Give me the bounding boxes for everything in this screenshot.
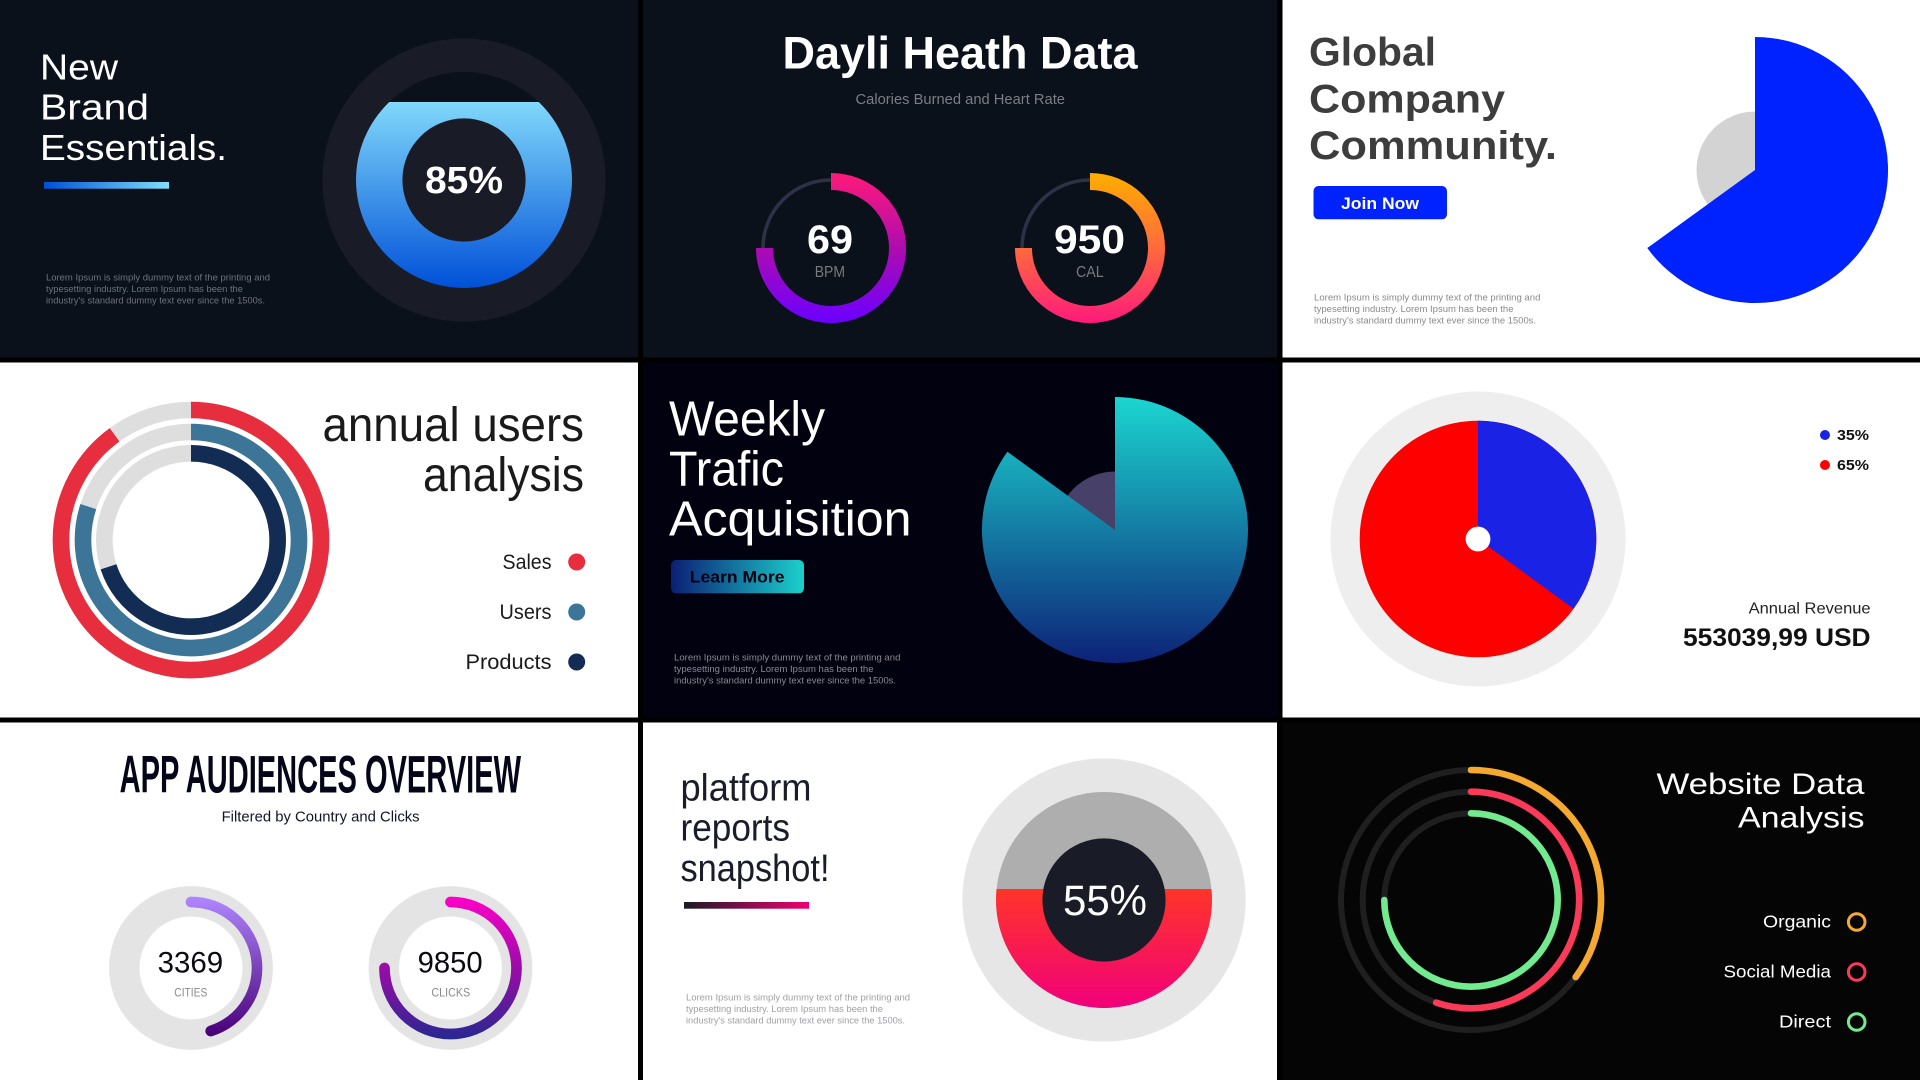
ring chart: 9850 clicks: 9850 xyxy=(418,946,483,979)
label: Annual Revenue: Annual Revenue xyxy=(1749,600,1871,617)
body text: Lorem Ipsum is simply dummy text of the printing and xyxy=(46,272,270,284)
accent bar xyxy=(684,902,809,909)
panel: annual users analysis xyxy=(0,362,638,718)
radial line chart xyxy=(1341,770,1601,1030)
heading: Global Company Community xyxy=(1309,31,1557,168)
heading: APP AUDIENCES OVERVIEW: APP AUDIENCES OVERVIEW xyxy=(120,745,521,804)
body text: typesetting industry. Lorem Ipsum has been the xyxy=(686,1004,883,1015)
heading: Dayli Heath Data: Dayli Heath Data xyxy=(782,27,1138,78)
body text: Lorem Ipsum is simply dummy text of the printing and xyxy=(686,992,910,1004)
ring chart: 3369 cities: 3369 xyxy=(158,946,223,979)
ring chart: 69 BPM: 69 xyxy=(807,218,853,262)
heading: New Brand Essentials: New xyxy=(40,46,119,87)
heading: Global Company Community: Company xyxy=(1309,77,1506,121)
heading: New Brand Essentials: Brand xyxy=(40,86,149,127)
subtitle: Calories Burned and Heart Rate xyxy=(856,92,1065,108)
pie chart: blue xyxy=(1647,37,1888,303)
body text xyxy=(686,992,910,1026)
legend xyxy=(1820,427,1869,474)
ring chart: 9850 clicks xyxy=(384,901,517,1035)
heading: annual users analysis: analysis xyxy=(423,449,584,502)
button: Join Now: Join Now xyxy=(1341,194,1420,213)
body text xyxy=(674,652,900,686)
heading: Global Company Community: Global xyxy=(1309,31,1436,75)
ring chart: 69 BPM: BPM xyxy=(815,264,845,281)
legend xyxy=(1724,911,1865,1032)
heading: New Brand Essentials xyxy=(40,46,227,168)
heading: Website Data Analysis: Analysis xyxy=(1738,801,1864,834)
body text xyxy=(1314,292,1540,326)
body text xyxy=(46,272,270,306)
ring chart: 950 CAL xyxy=(1022,180,1156,314)
heading: Weekly Trafic Acquisition: Acquisition xyxy=(669,492,912,546)
body text: typesetting industry. Lorem Ipsum has been the xyxy=(1314,304,1514,315)
pie chart: teal gradient xyxy=(982,397,1248,663)
donut chart: 55% xyxy=(962,758,1246,1042)
value: 553039,99 USD: 553039,99 USD xyxy=(1683,624,1871,652)
ring chart: 950 CAL: CAL xyxy=(1076,264,1104,281)
ring chart: 9850 clicks: CLICKS xyxy=(431,988,471,1000)
accent bar xyxy=(44,182,169,189)
button: Learn More xyxy=(671,560,804,593)
legend: 65% xyxy=(1837,457,1869,474)
radial bar chart xyxy=(61,410,321,670)
ring chart: 3369 cities xyxy=(124,901,258,1035)
body text: Lorem Ipsum is simply dummy text of the printing and xyxy=(674,652,900,664)
legend: Organic xyxy=(1763,911,1831,931)
heading: platform reports snapshot xyxy=(680,767,830,890)
donut chart: 85%: 85% xyxy=(425,160,503,202)
heading: New Brand Essentials: Essentials. xyxy=(40,127,227,168)
heading: Website Data Analysis xyxy=(1656,768,1865,834)
legend: Products xyxy=(466,651,552,674)
panel: global company community xyxy=(1282,0,1920,358)
body text: industry's standard dummy text ever since the 1500s. xyxy=(686,1016,905,1026)
heading: Weekly Trafic Acquisition: Trafic xyxy=(669,442,784,496)
heading: Website Data Analysis: Website Data xyxy=(1656,768,1865,801)
heading: annual users analysis: annual users xyxy=(322,399,584,452)
legend: Direct xyxy=(1779,1012,1831,1032)
body text: typesetting industry. Lorem Ipsum has been the xyxy=(674,664,874,675)
legend xyxy=(466,551,585,674)
panel: website data analysis xyxy=(1282,722,1920,1080)
heading: platform reports snapshot: reports xyxy=(680,807,790,849)
body text: industry's standard dummy text ever since the 1500s. xyxy=(1314,316,1536,326)
body text: industry's standard dummy text ever since the 1500s. xyxy=(674,676,896,686)
heading: Weekly Trafic Acquisition xyxy=(669,392,912,546)
body text: Lorem Ipsum is simply dummy text of the printing and xyxy=(1314,292,1540,304)
heading: platform reports snapshot: platform xyxy=(680,767,812,809)
panel: daily health data xyxy=(643,0,1277,358)
heading: Global Company Community: Community. xyxy=(1309,124,1557,168)
legend: Users xyxy=(500,601,552,624)
heading: Weekly Trafic Acquisition: Weekly xyxy=(669,392,825,446)
panel: platform reports snapshot xyxy=(643,722,1277,1080)
donut chart: 85% xyxy=(322,38,606,322)
ring chart: 69 BPM xyxy=(763,180,898,314)
legend: Sales xyxy=(502,551,552,574)
button: Learn More: Learn More xyxy=(690,568,784,587)
legend: 35% xyxy=(1837,427,1869,444)
ring chart: 950 CAL: 950 xyxy=(1054,218,1125,262)
panel: annual revenue xyxy=(1282,362,1920,718)
body text: industry's standard dummy text ever since the 1500s. xyxy=(46,296,265,306)
body text: typesetting industry. Lorem Ipsum has been the xyxy=(46,284,243,295)
button: Join Now xyxy=(1314,186,1447,219)
pie chart: 35% / 65% xyxy=(1330,392,1626,686)
ring chart: 3369 cities: CITIES xyxy=(174,988,208,1000)
heading: annual users analysis xyxy=(322,399,584,502)
donut chart: 55%: 55% xyxy=(1063,877,1147,925)
subtitle: Filtered by Country and Clicks xyxy=(222,810,420,826)
panel: new brand essentials xyxy=(0,0,638,358)
panel: weekly traffic acquisition xyxy=(643,362,1277,718)
legend: Social Media xyxy=(1724,962,1831,982)
panel: app audiences overview xyxy=(0,722,638,1080)
heading: platform reports snapshot: snapshot! xyxy=(680,848,830,890)
